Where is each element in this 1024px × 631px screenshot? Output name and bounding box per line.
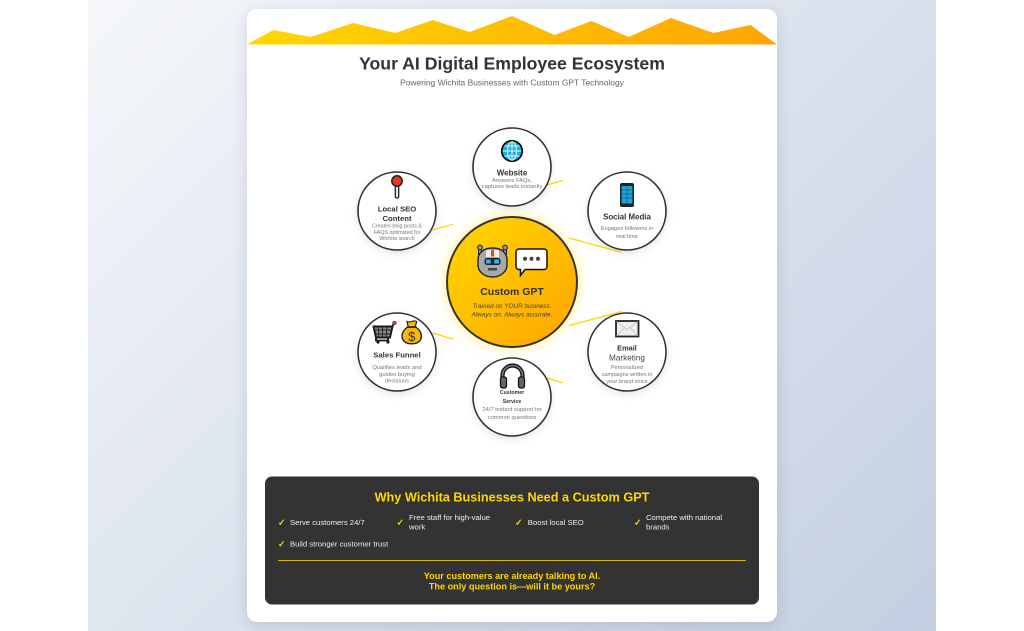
label: Website: Website: [497, 169, 528, 178]
label: Email Marketing: [609, 343, 645, 362]
description: Email Marketing: Personalized: [611, 365, 643, 371]
label: Local SEO Content: Local SEO: [378, 205, 416, 214]
benefit: free staff: Free staff for high-value: [409, 513, 490, 522]
benefit: free staff: ✓: [396, 518, 404, 528]
header zigzag banner: [247, 16, 777, 44]
icon: money bag: $: [408, 329, 416, 344]
hub description: Always on. Always accurate.: [471, 312, 552, 319]
label: Customer Service: [500, 390, 524, 405]
description: Website: [482, 178, 542, 190]
icon: globe: [502, 141, 522, 161]
connector lines: [433, 180, 622, 383]
label: Email Marketing: Email: [617, 343, 637, 352]
node: Customer Service: [473, 358, 551, 436]
benefit: customer trust: Build stronger customer trust: [290, 540, 389, 548]
description: Customer Service: [482, 407, 542, 421]
benefit: serve customers: ✓: [278, 518, 286, 528]
benefit: national brands: Compete with national: [646, 513, 722, 522]
label: Email Marketing: Marketing: [609, 353, 645, 362]
closing message: Your customers are already talking to AI.: [424, 571, 600, 581]
description: Local SEO Content: Wichita search: [379, 236, 415, 242]
benefit: local SEO: ✓: [515, 518, 523, 528]
benefit: serve customers: Serve customers 24/7: [290, 518, 365, 527]
description: Social Media: real time: [616, 234, 638, 240]
description: Customer Service: common questions: [488, 415, 536, 421]
icon: round pushpin: [392, 176, 402, 198]
benefit: local SEO: Boost local SEO: [528, 518, 584, 527]
white card: [247, 9, 777, 622]
benefit: national brands: brands: [646, 522, 670, 532]
description: Local SEO Content: [372, 224, 422, 242]
label: Local SEO Content: [378, 205, 416, 223]
label: Customer Service: Customer: [500, 390, 524, 396]
benefit: national brands: [634, 513, 722, 532]
description: Sales Funnel: guides buying: [379, 372, 415, 378]
hub description: [471, 303, 552, 319]
description: Email Marketing: campaigns written in: [602, 372, 652, 378]
description: Sales Funnel: Qualifies leads and: [372, 365, 422, 371]
description: Sales Funnel: [372, 365, 422, 385]
central hub: Custom GPT: [447, 217, 577, 347]
subtitle: Powering Wichita Businesses with Custom GPT Technology: [400, 78, 625, 88]
benefit: free staff: [396, 513, 490, 532]
panel: why Wichita businesses need a custom GPT: [265, 476, 759, 604]
icon: robot: [478, 245, 507, 277]
icon: envelope: [616, 321, 638, 336]
title: Your AI Digital Employee Ecosystem: [359, 53, 665, 73]
description: Local SEO Content: Creates blog posts &: [372, 224, 422, 230]
description: Social Media: [601, 226, 653, 240]
description: Social Media: Engages followers in: [601, 226, 653, 232]
label: Social Media: Social Media: [603, 212, 652, 221]
hub label: Custom GPT: [480, 286, 544, 298]
description: Website: captures leads instantly: [482, 184, 542, 190]
icon: headphones: [500, 366, 524, 388]
description: Email Marketing: your brand voice: [606, 379, 648, 385]
description: Website: Answers FAQs,: [492, 178, 532, 184]
node: Local SEO Content: [358, 172, 436, 250]
closing message: The only question is—will it be yours?: [429, 582, 596, 592]
label: Customer Service: Service: [503, 399, 521, 405]
label: Sales Funnel: Sales Funnel: [373, 350, 421, 359]
description: Customer Service: 24/7 instant support for: [482, 407, 542, 413]
benefit: customer trust: ✓: [278, 539, 286, 549]
closing message: [424, 571, 600, 592]
node: Email Marketing: [588, 313, 666, 391]
hub description: Trained on YOUR business.: [473, 303, 551, 310]
panel heading: Why Wichita Businesses Need a Custom GPT: [375, 490, 650, 504]
description: Sales Funnel: decisions: [385, 379, 409, 385]
icon: speech bubble: [516, 249, 547, 276]
node: Sales Funnel: [358, 313, 436, 391]
icon: shopping cart: [374, 321, 396, 344]
icon: smartphone: [620, 183, 634, 207]
benefit: national brands: ✓: [634, 518, 642, 528]
node: Website: [473, 128, 551, 206]
description: Local SEO Content: FAQS optimized for: [374, 230, 421, 236]
label: Local SEO Content: Content: [382, 214, 412, 223]
description: Email Marketing: [602, 365, 652, 385]
benefit: free staff: work: [408, 522, 425, 532]
node: Social Media: [588, 172, 666, 250]
